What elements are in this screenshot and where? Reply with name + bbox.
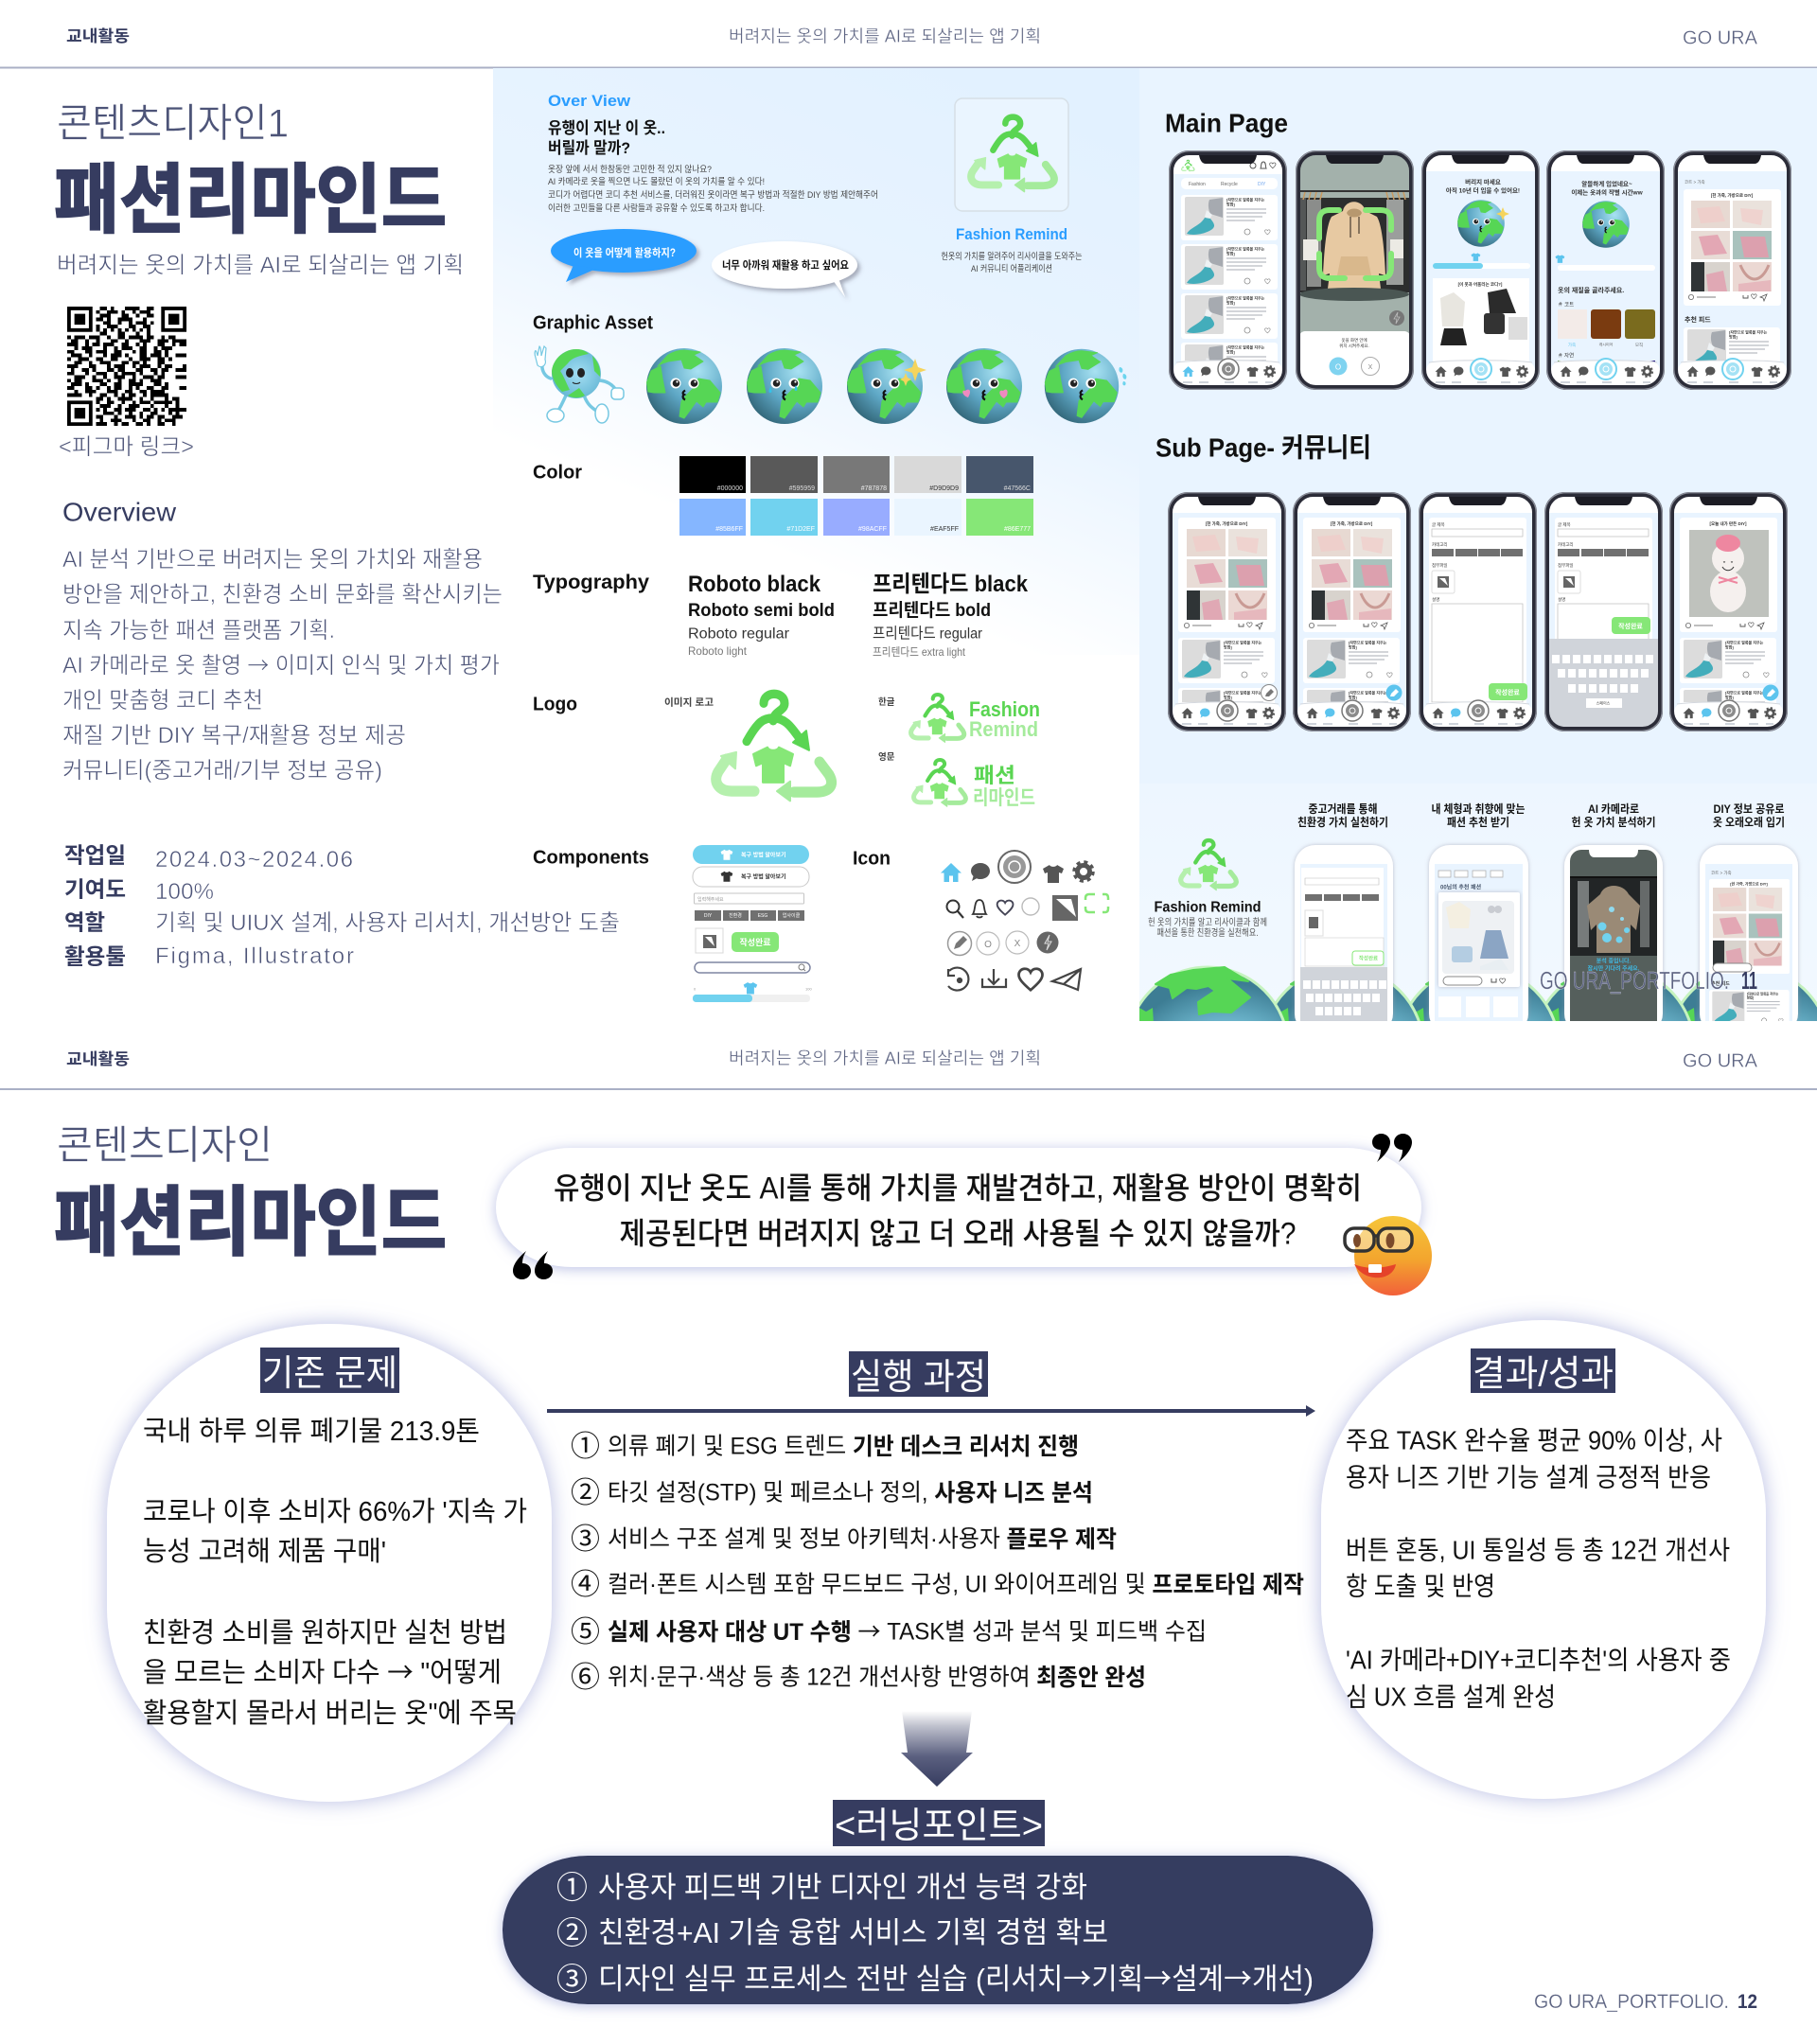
phone: community post gray pencil: [헌 가죽, 가방으로 DIY]	[1206, 520, 1248, 527]
mockup: secondhand post: 작성완료	[1359, 954, 1378, 961]
roboto samples: Roboto regular	[688, 626, 790, 643]
arrow: down to learning points	[901, 1711, 973, 1787]
learning points list	[598, 1871, 1314, 1998]
panel: graphic asset	[533, 312, 1126, 424]
search bar	[695, 962, 810, 973]
intro description: 코디가 어렵다면 코디 추천 서비스를, 더러워진 옷이라면 복구 방법과 적절한 DIY 방법 제안해주어	[548, 189, 878, 201]
feature captions: 중고거래를 통해	[1308, 802, 1378, 816]
submit button: 작성완료	[739, 937, 771, 947]
wordmark: english: Fashion	[969, 697, 1040, 721]
phone: home feed	[1169, 150, 1287, 390]
typography heading: Typography	[533, 572, 649, 593]
category chips: DIY	[704, 913, 713, 919]
wordmark: english: Remind	[969, 717, 1038, 741]
swatches: #000000	[717, 485, 743, 492]
intro description: 이러한 고민들을 다른 사람들과 공유할 수 있도록 하고자 합니다.	[548, 203, 765, 214]
header: page 11	[0, 27, 1817, 68]
phone: wear longer result: [이 옷과 어울리는 코디?]	[1458, 281, 1503, 288]
roboto samples: Roboto black	[688, 572, 821, 597]
pretendard samples: 프리텐다드 bold	[873, 600, 991, 621]
problem heading: 기존 문제	[262, 1354, 397, 1394]
circled learning numbers	[556, 1862, 588, 2000]
subtitle: 버려지는 옷의 가치를 AI로 되살리는 앱 기획	[57, 253, 464, 278]
problem text: 코로나 이후 소비자 66%가 '지속 가	[143, 1497, 527, 1527]
problem text: 국내 하루 의류 폐기물 213.9톤	[143, 1416, 480, 1447]
secondary button	[693, 867, 809, 887]
panel: promo mockups	[1139, 802, 1817, 1021]
phone: write post	[1419, 492, 1537, 731]
app description	[941, 251, 1083, 274]
main page heading: Main Page	[1165, 109, 1288, 138]
result text: 심 UX 흐름 설계 완성	[1346, 1683, 1556, 1712]
circled step numbers: ②	[571, 1469, 600, 1511]
globe: kiss	[646, 348, 722, 424]
circled step numbers: ①	[571, 1422, 600, 1465]
phone: material select: 이제는 옷과의 작별 시간ww	[1571, 188, 1644, 197]
footer: portfolio 12: 12	[1738, 1991, 1757, 2013]
process arrow	[547, 1405, 1315, 1417]
swatches: #98ACFF	[858, 526, 887, 533]
problem text: 을 모르는 소비자 다수 → "어떻게	[143, 1650, 502, 1690]
input field	[695, 893, 804, 904]
progress slider: 0	[694, 987, 697, 992]
submit button	[732, 932, 779, 952]
icons: action row	[948, 968, 1081, 991]
phone: home feed: DIY	[1258, 182, 1266, 187]
project meta list: 작업일	[64, 843, 126, 868]
wordmark: english	[911, 695, 1040, 743]
header: page 11: GO URA	[1683, 27, 1758, 48]
overview body text: 개인 맞춤형 코디 추천	[62, 688, 263, 714]
swatches: #595959	[789, 485, 815, 492]
panel: execution process	[547, 1351, 1315, 1696]
image logo label: 이미지 로고	[664, 696, 714, 708]
english label: 영문	[878, 751, 895, 763]
result bubble	[1321, 1320, 1766, 1799]
white speech bubble	[712, 241, 857, 297]
secondary button: 복구 방법 알아보기	[741, 873, 785, 881]
panel: middle style guide background	[493, 68, 1139, 655]
process heading: 실행 과정	[851, 1358, 986, 1398]
mockup: DIY sharing: [헌 가죽, 가방으로 DIY]	[1730, 881, 1768, 887]
result text: 용자 니즈 기반 기능 설계 긍정적 반응	[1346, 1463, 1711, 1492]
overview body text: AI 분석 기반으로 버려지는 옷의 가치와 재활용	[62, 547, 483, 573]
panel: existing problems	[107, 1324, 552, 1802]
mockup: DIY sharing	[1700, 845, 1798, 1034]
category chips	[695, 910, 804, 921]
phone: AI camera: X	[1368, 364, 1373, 371]
result text: 항 도출 및 반영	[1346, 1572, 1495, 1601]
phone: material select: 모직	[1635, 342, 1643, 348]
quote text: 제공된다면 버려지지 않고 더 오래 사용될 수 있지 않을까?	[619, 1216, 1297, 1250]
circled learning numbers: ③	[556, 1954, 588, 2000]
panel: logo	[533, 694, 1040, 809]
phone: AI camera: O	[1335, 362, 1341, 371]
intro headline: 유행이 지난 이 옷..	[548, 119, 665, 137]
category chips: 업사이클	[783, 912, 801, 919]
feature captions: AI 카메라로	[1588, 802, 1639, 816]
swatches: #47566C	[1004, 485, 1031, 492]
header: page 11: 버려지는 옷의 가치를 AI로 되살리는 앱 기획	[729, 27, 1041, 46]
project meta list: 역할	[64, 910, 105, 935]
phone: write post keyboard: 글 제목	[1558, 521, 1571, 528]
phone: write post keyboard: 카테고리	[1558, 541, 1574, 548]
wordmark: korean: 패션	[974, 764, 1015, 787]
icons: navigation row	[941, 851, 1093, 883]
progress slider	[693, 982, 812, 1002]
problem text: 친환경 소비를 원하지만 실천 방법	[143, 1617, 507, 1648]
swatches: #86E777	[1004, 526, 1031, 533]
globe: sweating	[1045, 349, 1126, 423]
phone: write post keyboard: 스페이스	[1596, 700, 1611, 706]
header: page 12: 교내활동	[66, 1050, 130, 1068]
intro headline: 버릴까 말까?	[548, 139, 630, 157]
phone: write post keyboard: 작성완료	[1618, 622, 1643, 630]
mockup: DIY sharing: 추천 피드	[1711, 980, 1730, 987]
overview body text: 방안을 제안하고, 친환경 소비 문화를 확산시키는	[62, 582, 503, 608]
panel: typography	[533, 572, 1029, 659]
phone: write post: 설명	[1432, 596, 1439, 602]
project meta list: 활용툴	[64, 944, 126, 969]
phone: DIY detail: [헌 가죽, 가방으로 DIY]	[1711, 192, 1754, 199]
wordmark: korean	[914, 760, 1035, 809]
category heading page 12: 콘텐츠디자인	[57, 1123, 273, 1168]
pretendard samples: 프리텐다드 extra light	[873, 645, 966, 659]
category heading: 콘텐츠디자인1	[57, 101, 289, 146]
promo description	[1148, 917, 1267, 939]
feature captions: 옷 오래오래 입기	[1713, 815, 1785, 829]
project meta list: 기획 및 UIUX 설계, 사용자 리서치, 개선방안 도출	[155, 910, 620, 936]
panel: icon set	[853, 848, 1108, 991]
mockup: AI analysis: 잠시만 기다려 주세요.	[1588, 965, 1640, 973]
phone: DIY detail	[1673, 150, 1791, 390]
circled step numbers: ⑥	[571, 1653, 600, 1696]
components heading: Components	[533, 847, 649, 868]
process steps: 위치·문구·색상 등 총 12건 개선사항 반영하여 최종안 완성	[608, 1664, 1146, 1690]
mascot: walking earth	[535, 346, 624, 423]
mockup: AI analysis: 분석 중입니다.	[1596, 958, 1632, 965]
progress slider: 100	[805, 987, 812, 992]
problem text: 활용할지 몰라서 버리는 옷"에 주목	[143, 1698, 517, 1729]
circled learning numbers: ①	[556, 1862, 588, 1908]
phone: material select: 옷의 재질을 골라주세요.	[1558, 286, 1624, 294]
circled learning numbers: ②	[556, 1908, 588, 1953]
primary button: 복구 방법 알아보기	[741, 852, 785, 859]
emoji: nerd face	[1345, 1216, 1432, 1295]
quote text	[554, 1171, 1362, 1250]
wordmark: korean: 리마인드	[973, 787, 1035, 809]
korean label: 한글	[878, 696, 895, 708]
problem text: 능성 고려해 제품 구매'	[143, 1537, 386, 1567]
overlay page number: portfolio 11: 11	[1741, 966, 1757, 995]
globe: crying	[747, 348, 822, 424]
circled step numbers	[571, 1422, 600, 1696]
overview body text: 재질 기반 DIY 복구/재활용 정보 제공	[62, 723, 406, 749]
app logo card	[955, 98, 1068, 211]
panel: main page screens	[1165, 109, 1791, 390]
closing quote mark	[1372, 1134, 1412, 1162]
phone: AI camera	[1296, 150, 1414, 390]
roboto samples: Roboto semi bold	[688, 601, 835, 621]
learning points list: 디자인 실무 프로세스 전반 실습 (리서치→기획→설계→개선)	[598, 1955, 1314, 1998]
result text: 주요 TASK 완수율 평균 90% 이상, 사	[1346, 1426, 1722, 1455]
intro description	[548, 164, 878, 214]
process steps	[608, 1433, 1304, 1690]
process steps: 서비스 구조 설계 및 정보 아키텍처·사용자 플로우 제작	[608, 1525, 1117, 1552]
phone: material select: 가죽	[1568, 342, 1576, 348]
phone: AI camera: 옷을 화면 안에	[1341, 337, 1367, 344]
overview body text	[62, 547, 503, 784]
process steps: 타깃 설정(STP) 및 페르소나 정의, 사용자 니즈 분석	[608, 1479, 1093, 1506]
phone: wear longer result: 아직 10년 더 입을 수 있어요!	[1446, 186, 1520, 195]
feature captions: 친환경 가치 실천하기	[1297, 815, 1388, 829]
panel: components	[533, 845, 812, 1002]
panel: learning points	[503, 1856, 1373, 2004]
icons: outline row	[946, 894, 1108, 921]
globe: hearts	[946, 348, 1022, 424]
intro headline	[548, 119, 665, 157]
quote callout	[496, 1134, 1432, 1295]
promo description: 패션을 통한 친환경을 실천해요.	[1156, 926, 1259, 939]
phone: material select: ＃ 자연	[1558, 351, 1574, 359]
project meta list	[64, 843, 620, 969]
category chips: 친환경	[729, 912, 742, 919]
phone: community post blue pencil	[1293, 492, 1411, 733]
phone: DIY detail: 코트 > 가죽	[1685, 179, 1705, 185]
project meta list: 100%	[155, 879, 214, 905]
primary button	[693, 845, 809, 864]
project title: 패션리마인드	[54, 158, 447, 242]
background globes	[1139, 965, 1817, 1021]
QR code	[67, 307, 186, 426]
feature captions: 패션 추천 받기	[1447, 815, 1509, 829]
blue speech bubble: 이 옷을 어떻게 활용하지?	[573, 246, 676, 259]
pretendard samples: 프리텐다드 black	[873, 572, 1029, 597]
quote text: 유행이 지난 옷도 AI를 통해 가치를 재발견하고, 재활용 방안이 명확히	[554, 1171, 1362, 1205]
white speech bubble: 너무 아까워 재활용 하고 싶어요	[722, 258, 849, 272]
phone: community photo post: [오늘 내가 만든 DIY]	[1709, 520, 1747, 527]
phone: wear longer result	[1421, 150, 1540, 390]
mockup: DIY sharing: 코트 > 가죽	[1711, 870, 1732, 876]
circled step numbers: ③	[571, 1515, 600, 1558]
swatches: #D9D9D9	[929, 485, 959, 492]
header: page 11: 교내활동	[66, 27, 130, 45]
category chips: ESG	[758, 913, 767, 919]
phone: AI camera: 위치 시켜주세요.	[1339, 343, 1369, 349]
phone: write post: 카테고리	[1432, 541, 1448, 548]
icon heading: Icon	[853, 848, 891, 869]
learning points list: 사용자 피드백 기반 디자인 개선 능력 강화	[598, 1871, 1087, 1904]
overview body text: 지속 가능한 패션 플랫폼 기획.	[62, 618, 335, 643]
result text: 버튼 혼동, UI 통일성 등 총 12건 개선사	[1346, 1536, 1730, 1565]
panel: community sub page screens	[1155, 433, 1788, 733]
header: page 12: GO URA	[1683, 1050, 1758, 1071]
project meta list: 기여도	[64, 877, 126, 902]
phone: material select: 알뜰하게 입었네요~	[1581, 180, 1632, 188]
swatches: #71D2EF	[786, 526, 815, 533]
panel: left project summary	[54, 101, 620, 969]
phone: wear longer result: 버리지 마세요	[1465, 178, 1501, 186]
panel: results	[1321, 1320, 1766, 1799]
circled step numbers: ⑤	[571, 1608, 600, 1650]
promo description: 헌 옷의 가치를 알고 리사이클과 함께	[1148, 917, 1267, 928]
swatches: #85B6FF	[715, 526, 743, 533]
color heading: Color	[533, 462, 582, 483]
process steps: 의류 폐기 및 ESG 트렌드 기반 데스크 리서치 진행	[608, 1433, 1079, 1459]
learning points box	[503, 1856, 1373, 2004]
graphic asset heading: Graphic Asset	[533, 312, 653, 333]
phone: community post gray pencil	[1168, 492, 1286, 733]
feature captions: 내 체형과 취향에 맞는	[1431, 802, 1526, 816]
app name: Fashion Remind	[956, 225, 1067, 243]
overview heading: Overview	[62, 498, 177, 527]
phone: write post keyboard: 설명	[1558, 596, 1565, 602]
phone: write post: 작성완료	[1495, 688, 1520, 696]
mockup: secondhand post	[1295, 845, 1393, 1034]
footer: portfolio 12: GO URA_PORTFOLIO.	[1534, 1991, 1729, 2013]
project meta list: 2024.03~2024.06	[155, 847, 353, 872]
input field: 입력해주세요	[697, 896, 724, 903]
logo heading: Logo	[533, 694, 577, 714]
feature captions	[1297, 802, 1785, 829]
phone: material select: ＃ 코트	[1558, 301, 1574, 308]
phone: write post keyboard	[1544, 492, 1663, 731]
problem bubble	[107, 1324, 552, 1802]
project title page 12: 패션리마인드	[54, 1181, 447, 1265]
process steps: 실제 사용자 대상 UT 수행 → TASK별 성과 분석 및 피드백 수집	[608, 1613, 1207, 1648]
pretendard samples: 프리텐다드 regular	[873, 626, 983, 643]
learning points list: 친환경+AI 기술 융합 서비스 기획 경험 확보	[598, 1916, 1108, 1949]
sub page heading: Sub Page- 커뮤니티	[1155, 433, 1371, 463]
feature captions: 헌 옷 가치 분석하기	[1571, 815, 1656, 829]
panel: right screens background	[1139, 68, 1817, 1021]
upload tile	[696, 928, 723, 953]
header: page 12: 버려지는 옷의 가치를 AI로 되살리는 앱 기획	[729, 1049, 1041, 1068]
over view heading: Over View	[548, 92, 631, 110]
QR caption: <피그마 링크>	[59, 434, 194, 460]
mockup: outfit recommendation	[1429, 845, 1528, 1034]
result text	[1346, 1426, 1731, 1712]
circled step numbers: ④	[571, 1560, 600, 1603]
phone: write post: 글 제목	[1432, 521, 1445, 528]
result heading: 결과/성과	[1473, 1354, 1614, 1394]
quote bubble	[496, 1148, 1421, 1267]
blue speech bubble	[551, 229, 697, 282]
phone: community photo post	[1669, 492, 1788, 733]
phone: community post blue pencil: [헌 가죽, 가방으로 DIY]	[1331, 520, 1373, 527]
project meta list: Figma, Illustrator	[155, 943, 354, 969]
opening quote mark	[513, 1251, 553, 1279]
intro description: AI 카메라로 옷을 찍으면 나도 몰랐던 이 옷의 가치를 알 수 있다!	[548, 176, 765, 187]
panel: over view intro	[548, 92, 1083, 297]
overview body text: 커뮤니티(중고거래/기부 정보 공유)	[62, 758, 382, 784]
phone: material select: 캐시미어	[1599, 342, 1614, 347]
globe: sparkle	[847, 348, 926, 424]
swatches: #787878	[861, 485, 887, 492]
phone: home feed: Recycle	[1221, 182, 1238, 187]
big image logo	[716, 694, 832, 801]
roboto samples: Roboto light	[688, 644, 748, 658]
panel: color palette	[533, 456, 1033, 536]
promo logo	[1181, 840, 1236, 890]
swatches: #EAF5FF	[930, 526, 959, 533]
icons: circle buttons row: O	[984, 940, 992, 950]
result text: 'AI 카메라+DIY+코디추천'의 사용자 중	[1346, 1646, 1731, 1675]
app description: AI 커뮤니티 어플리케이션	[971, 264, 1052, 274]
phone: material select	[1546, 150, 1665, 390]
overlay page number: portfolio 11: GO URA_PORTFOLIO.	[1540, 966, 1729, 995]
process steps: 컬러·폰트 시스템 포함 무드보드 구성, UI 와이어프레임 및 프로토타입 제작	[608, 1571, 1304, 1597]
learning points heading: <러닝포인트>	[835, 1806, 1043, 1846]
mockup: AI analysis	[1564, 845, 1663, 1034]
phone: write post: 첨부파일	[1432, 562, 1448, 569]
icons: circle buttons row	[948, 931, 1058, 956]
swatches	[679, 456, 1033, 536]
phone: DIY detail: 추천 피드	[1685, 315, 1711, 324]
intro description: 옷장 앞에 서서 한참동안 고민한 적 있지 않나요?	[548, 164, 712, 175]
phone: write post keyboard: 첨부파일	[1558, 562, 1574, 569]
problem text	[143, 1416, 527, 1729]
promo app name: Fashion Remind	[1155, 900, 1261, 916]
icons: circle buttons row: X	[1014, 939, 1021, 949]
roboto samples	[688, 572, 835, 658]
promo background	[1139, 784, 1817, 1021]
overview body text: AI 카메라로 옷 촬영 → 이미지 인식 및 가치 평가	[62, 646, 500, 679]
mockup: outfit recommendation: 00님의 추천 패션	[1440, 884, 1481, 891]
phone: home feed: Fashion	[1189, 182, 1206, 187]
pretendard samples	[873, 572, 1029, 659]
feature captions: DIY 정보 공유로	[1713, 802, 1785, 816]
header: page 12	[0, 1049, 1817, 1090]
app description: 헌옷의 가치를 알려주어 리사이클을 도와주는	[941, 251, 1083, 262]
